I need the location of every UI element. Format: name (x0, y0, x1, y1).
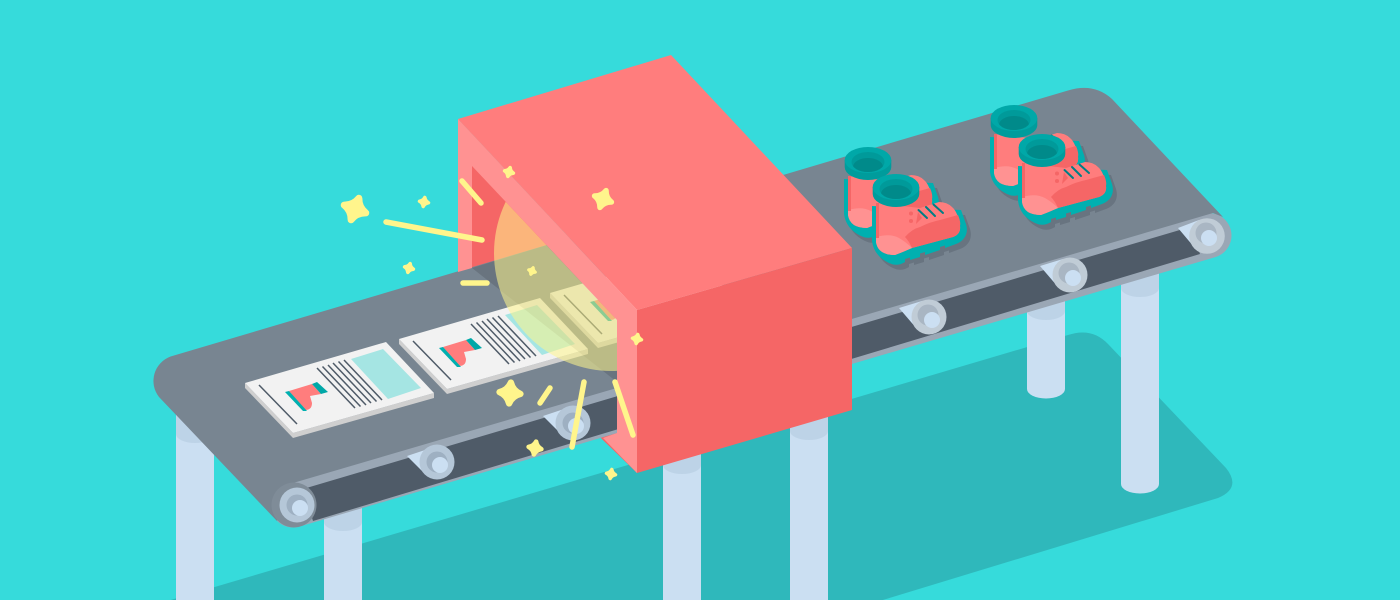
leg: rear centre right (790, 400, 828, 600)
conveyor underside (293, 227, 1209, 521)
document: catalogue page three inside scanner (550, 252, 739, 348)
rollers (407, 218, 1225, 479)
scanner interior (458, 119, 637, 473)
leg: rear left (176, 400, 214, 600)
roller: right second (1040, 258, 1088, 292)
boots pair one (844, 147, 971, 270)
roller: right end (1178, 218, 1225, 254)
boot: rear (844, 147, 943, 243)
scanner front frame (458, 119, 637, 473)
document: catalogue page two (399, 298, 588, 394)
boot: front right (1018, 134, 1117, 230)
roller: left end (280, 488, 314, 522)
illustration: conveyor belt through a scanner (153, 55, 1232, 600)
scanner top face (458, 55, 852, 310)
leg: rear far right (1027, 280, 1065, 398)
scanner body (458, 55, 852, 473)
leg: front far right (1121, 250, 1159, 494)
table legs (176, 250, 1159, 600)
scanner shadow on belt (472, 245, 617, 382)
boot: front (872, 174, 971, 270)
boot: rear right (990, 105, 1089, 201)
light rays (386, 181, 633, 447)
leg: front centre left (663, 440, 701, 600)
boots pair two (990, 105, 1117, 230)
dark belt return (303, 227, 1200, 521)
roller: left second (407, 444, 454, 480)
document: catalogue page one (245, 342, 434, 438)
leg: front left (324, 490, 362, 600)
sparkles (340, 166, 642, 479)
belt rim (293, 236, 1209, 505)
belt top surface (153, 88, 1223, 521)
roller: right first (899, 300, 946, 334)
roller: under scanner (543, 406, 590, 440)
scanner side face (637, 248, 852, 473)
floor shadow (130, 332, 1232, 600)
belt left end cap (272, 482, 316, 528)
scanner light beam (494, 202, 617, 371)
